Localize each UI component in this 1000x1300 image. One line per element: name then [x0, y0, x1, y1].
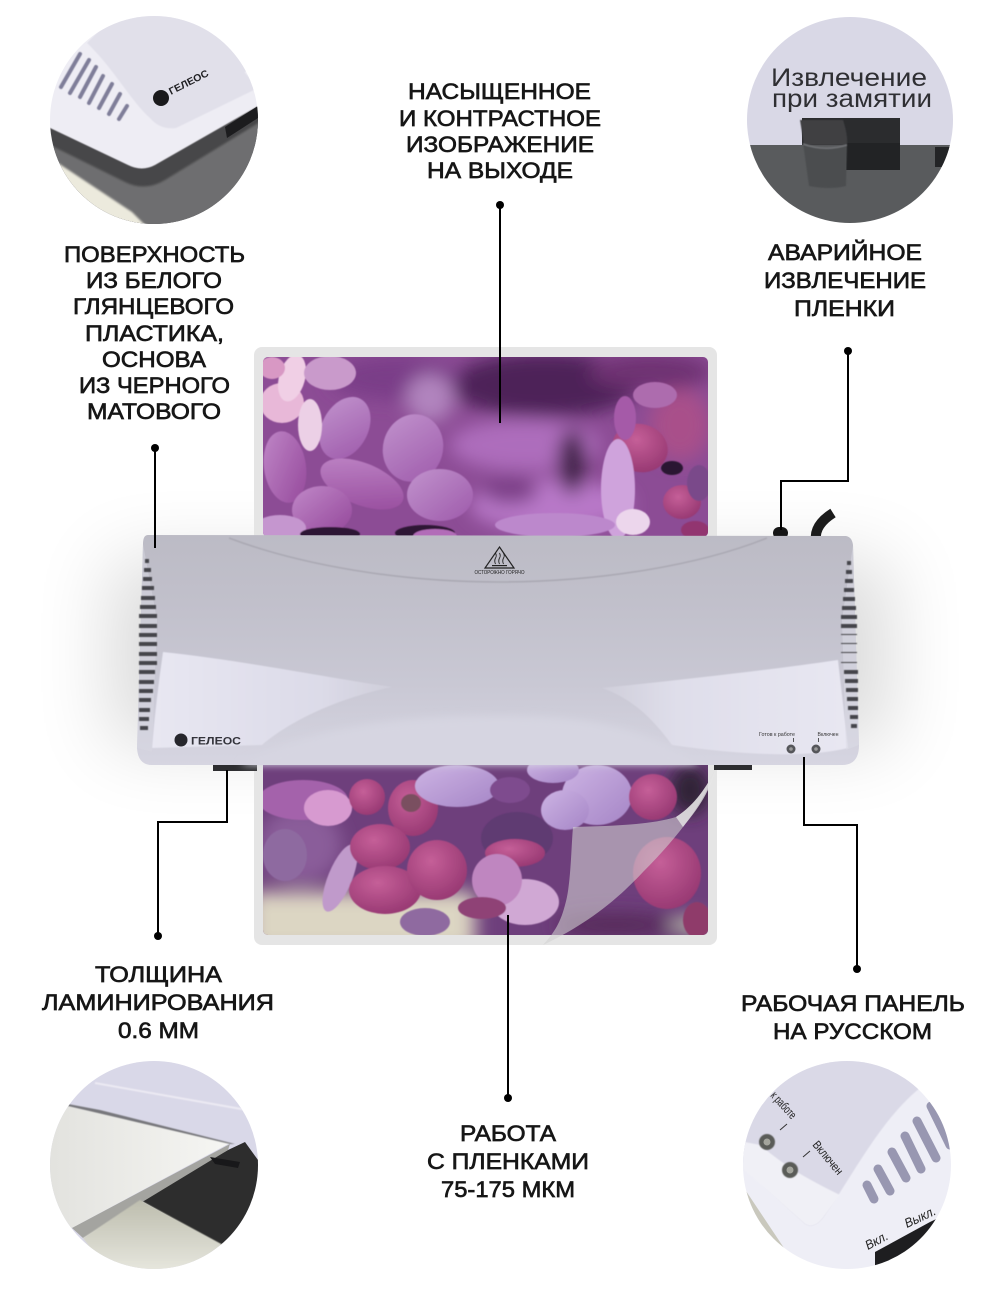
text: output image: ИЗОБРАЖЕНИЕ [406, 132, 594, 157]
vents [61, 54, 127, 119]
upper panel [746, 1061, 918, 1194]
curled corner of laminating film [543, 768, 716, 945]
text: control panel [741, 991, 965, 1044]
circle photo: russian control panel: к работе [768, 1089, 800, 1122]
text: control panel: РАБОЧАЯ ПАНЕЛЬ [741, 991, 965, 1016]
callout line: surface [151, 444, 159, 548]
brand logo [174, 734, 241, 748]
callout line: control panel [804, 757, 861, 973]
dark base [50, 106, 258, 224]
callout line: output image [496, 201, 504, 423]
paper edge [72, 1144, 230, 1238]
text: emergency release: АВАРИЙНОЕ [768, 240, 922, 265]
table surface [83, 1200, 222, 1269]
text: thickness [42, 962, 274, 1043]
upper panel [87, 10, 258, 128]
photo: top part of lilac print [254, 351, 712, 543]
callout line: emergency release [781, 347, 852, 530]
text: film range: С ПЛЕНКАМИ [427, 1149, 589, 1174]
text: film range [427, 1121, 589, 1202]
text: surface materials: ИЗ БЕЛОГО [86, 268, 222, 293]
glossy reflection right [602, 660, 848, 754]
lever [800, 120, 847, 188]
laminator rear knob and power cable [773, 513, 833, 540]
text: thickness: ЛАМИНИРОВАНИЯ [42, 990, 274, 1015]
text: film range: 75-175 МКМ [441, 1177, 575, 1202]
text: emergency release: ИЗВЛЕЧЕНИЕ [764, 268, 926, 293]
slot [225, 106, 258, 138]
text: film range: РАБОТА [460, 1121, 556, 1146]
heat warning icon: ОСТОРОЖНО ГОРЯЧО [474, 570, 525, 576]
circle photo: gloss surface detail: ГЕЛЕОС [167, 68, 211, 98]
text: output image: И КОНТРАСТНОЕ [399, 106, 601, 131]
soft shadow behind laminator [110, 560, 890, 745]
glossy reflection lower middle [240, 716, 700, 765]
text: surface materials: МАТОВОГО [87, 399, 221, 424]
circle photo: russian control panel: Вкл. [862, 1228, 891, 1253]
glossy reflection left [152, 652, 392, 748]
text: surface materials: ОСНОВА [102, 347, 206, 372]
status indicators: Готов к работе [759, 732, 795, 738]
side edge highlights [137, 544, 157, 752]
text: output image: НАСЫЩЕННОЕ [408, 79, 591, 104]
vent slots right [841, 561, 858, 728]
text: surface materials: ПОВЕРХНОСТЬ [64, 242, 245, 267]
circle photo: lamination thickness [45, 1060, 258, 1280]
text: surface materials [64, 242, 245, 424]
text: emergency release: ПЛЕНКИ [794, 296, 895, 321]
text: surface materials: ИЗ ЧЕРНОГО [79, 373, 230, 398]
circle photo: emergency release lever [745, 15, 955, 230]
text: output image: НА ВЫХОДЕ [427, 158, 573, 183]
callout line: thickness [154, 770, 227, 940]
circle photo: russian control panel: Выкл. [902, 1203, 938, 1231]
paper sheet [45, 1102, 230, 1228]
printed text on device: Извлечение [771, 64, 927, 92]
dark tray [143, 1142, 258, 1245]
brand logo: ГЕЛЕОС [191, 736, 241, 748]
vents [867, 1106, 950, 1199]
table surface [60, 162, 146, 224]
photo: bottom part of lilac print [263, 765, 708, 935]
notch [802, 118, 900, 145]
circle photo: russian control panel: Включен [810, 1138, 846, 1178]
laminator feet [213, 763, 752, 771]
text: thickness: ТОЛЩИНА [95, 962, 222, 987]
text: output image [399, 79, 601, 183]
vent slots left [139, 559, 157, 730]
callout line: film range [504, 915, 512, 1102]
heat warning icon [474, 547, 525, 576]
circle photo: gloss surface detail [50, 16, 258, 224]
text: surface materials: ПЛАСТИКА, [85, 321, 224, 346]
text: surface materials: ГЛЯНЦЕВОГО [73, 294, 234, 319]
status indicators [759, 732, 838, 754]
switch [875, 1219, 936, 1266]
brand mark [153, 90, 169, 106]
LED indicators [759, 1134, 775, 1150]
laminating sheet frame [254, 347, 717, 945]
laminator body [137, 535, 859, 765]
text: thickness: 0.6 ММ [118, 1018, 199, 1043]
circle photo: russian control panel [743, 1061, 951, 1269]
upper curved panel [229, 538, 767, 582]
text: control panel: НА РУССКОМ [773, 1019, 932, 1044]
text: emergency release [764, 240, 926, 321]
status indicators: Включен [818, 732, 838, 738]
circle photo: emergency release lever: при замятии [772, 85, 932, 113]
cream surface [746, 1192, 784, 1248]
